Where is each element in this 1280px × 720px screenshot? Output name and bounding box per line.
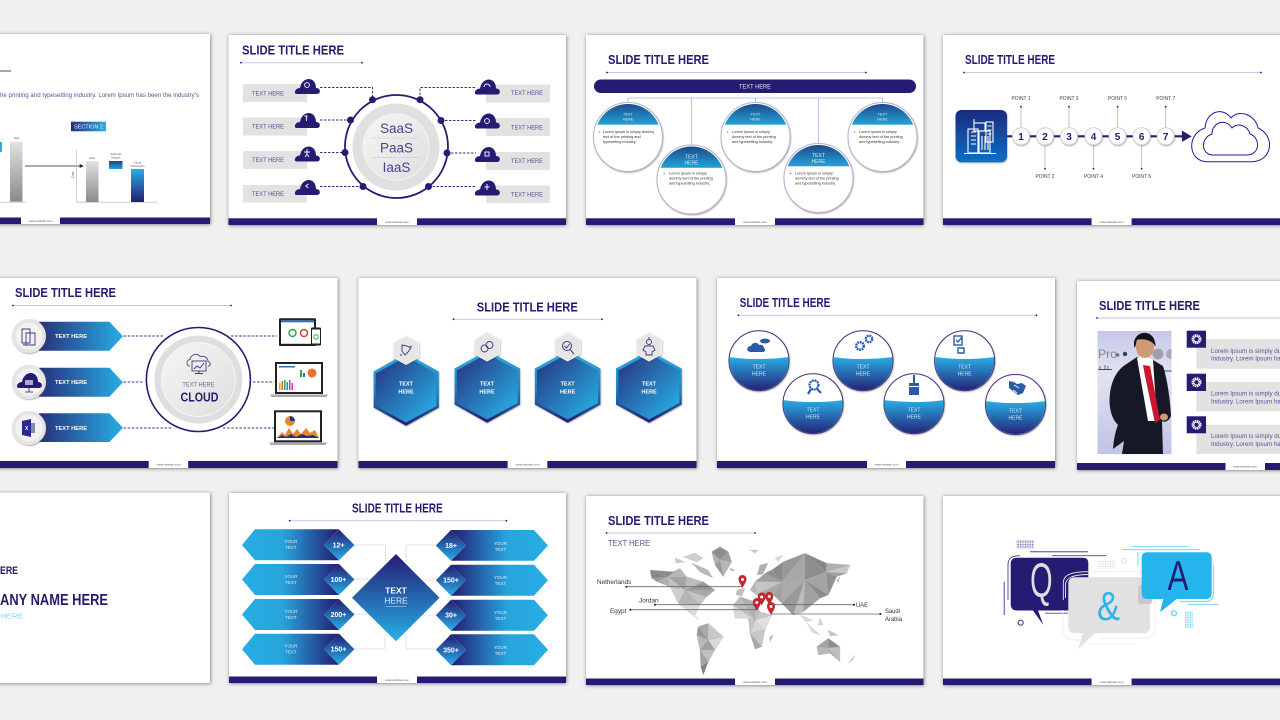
title: SLIDE TITLE HERE [740,295,831,310]
cloud inner disc [161,342,235,416]
circle 5: Lorem Ipsum is simply [859,130,897,134]
circle 2: dummy text of the printing [669,176,713,180]
title rule [453,318,603,320]
cloud icons [295,79,500,196]
service labels [380,121,413,175]
circle 2: • [664,172,666,176]
connector ends [1020,106,1167,170]
title rule [606,532,756,534]
point labels: POINT 1 [1012,96,1030,102]
right item 1: TEXT [495,547,506,552]
row 2 panel [1196,382,1280,411]
left item 1: 12+ [333,543,344,550]
circle 2: Lorem Ipsum is simply [669,172,707,176]
country labels: Egypt [610,608,627,615]
center diamond [352,554,440,641]
footer [1077,462,1280,470]
hexagon 2: HERE [479,389,495,395]
circle 6 [986,374,1046,436]
circle 3: TEXT [751,112,761,116]
left item 2: 100+ [331,577,346,584]
point labels: POINT 4 [1084,174,1103,180]
footer: www.website.com [1233,464,1257,468]
circle 2: HERE [685,160,699,166]
footer: www.website.com [516,462,540,466]
circle 5 [935,331,995,392]
circle 3: and typesetting industry. [732,140,773,144]
right item 3: TEXT [495,616,506,621]
right item 1 [436,530,548,561]
title: SLIDE TITLE HERE [965,52,1055,67]
cloud heading: CLOUD [180,390,218,404]
section 2 bar chart: Total [89,156,95,160]
footer [0,460,338,468]
service labels: PaaS [380,140,413,156]
right item 2: TEXT [495,581,506,586]
left item 4: TEXT [285,650,297,654]
left labels [243,84,307,202]
right label text: TEXT HERE [511,124,543,131]
grey backing [1138,585,1152,604]
subtitle fragment: ERE [0,565,18,577]
section 2 bar chart: Cost [71,172,75,178]
circle 4: • [790,172,792,176]
circle 3: Lorem Ipsum is simply [732,130,770,134]
dotted connectors [354,545,435,649]
footer: www.website.com [743,680,767,684]
circle 4: Lorem Ipsum is simply [795,172,833,176]
service labels: IaaS [383,160,410,175]
ring nodes [342,96,450,190]
circle 2 [657,145,726,214]
footer: www.website.com [385,220,409,224]
light dot pattern [1098,560,1115,568]
right item 2 [436,565,548,596]
point labels: POINT 5 [1108,96,1127,102]
circle 1: TEXT [753,364,765,370]
circle 4: HERE [907,414,922,420]
circle 1 [729,331,789,392]
footer [358,460,696,468]
slide: center diamond with numbers [229,493,566,683]
dot grid [1185,611,1193,628]
country labels: Saudi [885,608,900,615]
service separators [372,138,420,157]
leader lines [626,587,880,614]
right label text: TEXT HERE [511,90,543,97]
south america [697,623,723,675]
footer: www.website.com [157,462,181,466]
slide: cloud hub with devices [0,278,338,468]
circle 5: and typesetting industry. [859,140,900,144]
left item 3 [242,599,354,630]
footer: www.website.com [875,462,899,466]
slide: questions and answers [943,496,1280,685]
arrow row 3: X [25,426,29,432]
right labels [486,84,550,203]
slide: profile with bullet rows [1077,281,1280,470]
portrait photo: Pro [1098,347,1117,361]
circle 3: HERE [750,118,761,122]
timeline arrow [1007,132,1190,140]
footer: www.website.com [1100,220,1124,224]
section 2 bar chart: Support [111,155,121,159]
country labels: UAE [856,602,868,609]
title rule [289,520,507,522]
title: SLIDE TITLE HERE [352,501,443,516]
circle 5: HERE [877,118,888,122]
arrow row 3 [12,411,123,445]
title rule [606,72,867,73]
circle 3 [721,102,790,172]
node numbers: 6 [1139,132,1145,143]
circle 5: HERE [958,372,972,378]
dashed connectors [124,336,277,428]
hub disc [352,104,440,190]
hub inner disc [363,114,429,180]
circle 2: HERE [806,414,821,420]
hub ring [345,95,448,198]
eurasia [736,550,850,615]
node numbers: 7 [1163,132,1169,143]
leader ends [625,586,881,615]
bubble Q [1011,555,1088,625]
title rule [738,314,1037,316]
left label text [252,90,284,198]
circle 1: Lorem Ipsum is simply dummy [603,130,654,134]
circle 5: • [854,130,856,134]
footer [586,678,924,685]
tagline fragment: HERE [1,614,23,620]
left item 4: 150+ [331,647,346,654]
circle 5 [848,102,917,172]
section 2 bar chart: Staff and [111,152,121,156]
circle 3: TEXT [857,364,869,370]
portrait photo [1098,331,1176,454]
title: SLIDE TITLE HERE [608,52,709,67]
hexagon 3 [535,332,600,423]
arrow row 2: TEXT HERE [55,380,87,386]
header bar [594,80,916,93]
left item 3: 200+ [331,612,346,619]
left label text: TEXT HERE [252,90,284,98]
footer: www.website.com [29,219,53,223]
australia and new zealand [817,638,855,663]
circle 1: HERE [752,372,767,378]
right label text: TEXT HERE [511,192,543,198]
slide: hierarchy of circles [586,35,924,225]
bubble ampersand: & [1097,583,1120,629]
arrow row 1 [12,319,123,353]
left item 1: TEXT [285,545,297,550]
right item 3 [436,600,548,631]
hexagon 1: HERE [398,389,414,395]
device: tablet and phone [279,318,321,346]
white arcs around ampersand bubble [1063,572,1155,644]
device: laptop charts [270,362,328,397]
footer [229,676,566,683]
slide: section waterfall chart (cropped left) [0,34,210,224]
circle 5: dummy text of the printing [859,135,903,139]
circle 3: • [727,130,729,134]
node numbers: 2 [1042,132,1048,143]
slide: six water-level circles [717,278,1055,468]
row 2 text [1211,390,1280,405]
footer: www.website.com [743,220,767,224]
greenland and arctic islands [675,547,735,578]
service labels: SaaS [380,121,413,136]
country labels: Arabia [885,616,903,623]
point labels: POINT 7 [1156,96,1175,102]
circle 2: and typesetting industry. [669,182,710,186]
navy outlines behind Q [1004,552,1107,625]
right item 3: 30+ [445,613,457,620]
circle 2: TEXT [685,154,698,160]
node numbers: 1 [1018,132,1024,143]
right label text [511,90,543,198]
footer: www.website.com [1100,680,1124,684]
title rule [963,72,1262,73]
left item 4 [242,634,354,665]
hexagon 4: HERE [641,389,657,395]
numbered nodes [1012,128,1174,145]
footer [943,217,1280,225]
right item 4: TEXT [495,651,506,656]
section 2 label: SECTION 2 [74,124,103,130]
cloud disc [154,336,242,424]
circle 4: HERE [812,159,826,165]
circle 6: HERE [1009,415,1023,421]
section 2 bar chart: Cloud [134,160,141,164]
hexagon 2 [454,332,520,423]
circle 3: dummy text of the printing [732,135,776,139]
center diamond: TEXT [385,586,408,596]
circle 1 [594,102,662,172]
icon: cloud outline [1192,112,1269,162]
circle 2: TEXT [807,408,819,414]
intro text: he printing and typesetting industry. Lorem Ipsum has been the industry's [0,92,199,99]
circle 5: TEXT [878,112,888,116]
title rule [12,305,232,306]
circle 4 [784,143,853,212]
section 1 cropped bars [0,136,26,202]
company name: ANY NAME HERE [0,592,108,609]
circle 4 [884,374,944,435]
circle 4: TEXT [908,408,920,414]
footer [943,678,1280,685]
row 3 panel [1196,425,1280,454]
right item 4: 350+ [443,647,459,654]
title: SLIDE TITLE HERE [242,43,344,58]
arrow row 1: TEXT HERE [55,334,87,340]
arrow between sections [25,165,83,167]
blue outlines [1122,547,1218,616]
row 1 text [1211,348,1280,362]
row 3 text [1211,433,1280,448]
footer [717,460,1055,468]
dashed connectors [320,88,476,186]
row 2 icon [1187,374,1206,391]
low-poly world map [650,547,855,675]
node numbers: 5 [1115,132,1121,143]
circle 3: HERE [856,372,871,378]
subtitle: TEXT HERE [608,538,650,548]
southeast asia islands [800,615,838,636]
hexagon 1 [374,336,439,426]
footer [0,216,210,224]
hexagon 3: TEXT [561,382,575,388]
title rule [0,70,11,72]
cloud icon glyphs [304,83,490,190]
slide: closing company name (cropped left) [0,493,210,683]
circle 1: TEXT [623,112,634,116]
node numbers [1018,132,1169,143]
title rule [1096,317,1280,319]
title: SLIDE TITLE HERE [15,285,116,300]
connector lines [628,98,882,146]
left item 1: YOUR [284,539,298,544]
hexagon 2: TEXT [480,382,495,388]
cloud label: TEXT HERE [182,382,214,389]
left item 3: TEXT [285,615,297,620]
right item 2: YOUR [494,575,508,580]
point labels [1012,96,1175,180]
circle 6: TEXT [1009,408,1022,414]
section 2 label [71,122,106,131]
row 1 panel [1196,339,1280,369]
left item 2: TEXT [285,580,297,585]
arrow row 3: TEXT HERE [55,426,87,432]
left item 4: YOUR [284,644,298,648]
point labels: POINT 6 [1132,174,1151,180]
title rule [240,62,363,64]
left item 2: YOUR [284,574,298,579]
right label text: TEXT HERE [511,158,543,165]
slide: four hexagons [358,278,696,468]
africa [733,597,773,649]
circle 3 [833,331,893,392]
slide: seven point migration timeline [943,35,1280,225]
cloud ring [146,328,250,432]
icon: cloud monitor [187,354,210,374]
circle 4: dummy text of the printing [795,176,839,180]
pin centers [741,578,772,608]
circle 4: TEXT [812,153,825,159]
left label text: TEXT HERE [252,191,284,198]
right item 4 [436,634,548,665]
row 3 icon [1187,416,1206,433]
hexagon 4 [616,332,682,423]
left item 1 [242,529,354,560]
circle 5: TEXT [958,364,971,370]
arrow row 2 [12,365,123,399]
footer: www.website.com [385,678,409,682]
device: laptop dashboard [269,410,327,445]
dot pattern [1017,540,1034,548]
bubble A [1142,552,1212,612]
country labels: Netherlands [597,579,631,586]
circle 1: typesetting industry. [603,140,636,144]
slide: world map locations [586,496,924,685]
title: SLIDE TITLE HERE [1099,298,1200,313]
slide: SaaS PaaS IaaS hub [228,35,566,225]
hexagon 1: TEXT [399,382,414,388]
point connectors [1021,107,1166,169]
section 2 bar chart: Subscription [130,164,145,168]
bubble A: A [1168,552,1188,599]
header bar: TEXT HERE [739,83,771,90]
country labels: Jordan [639,598,659,605]
hexagon 4: TEXT [642,382,657,388]
point labels: POINT 3 [1060,96,1078,102]
title: SLIDE TITLE HERE [608,513,709,528]
location pins [738,575,775,615]
left item 2 [242,564,354,595]
title: SLIDE TITLE HERE [477,299,578,314]
left label text: TEXT HERE [252,124,284,131]
section 1 cropped bars: Total [13,136,19,140]
circle 1: • [598,130,600,134]
row 1 icon [1187,331,1206,348]
right item 4: YOUR [494,645,508,650]
center diamond: HERE [384,596,408,606]
bubble Q: Q [1030,555,1053,608]
right item 1: 18+ [445,543,457,550]
node numbers: 3 [1066,132,1072,143]
point labels: POINT 2 [1036,174,1054,180]
circle 4: and typesetting industry. [795,182,836,186]
footer [586,217,924,225]
section 2 bar chart [71,150,157,202]
left item 3: YOUR [284,609,298,614]
circle 1: HERE [623,118,634,122]
north america [650,568,715,620]
icon: office buildings tile [956,110,1007,162]
right item 2: 150+ [443,578,459,585]
bubble ampersand [1068,577,1150,649]
right item 1: YOUR [494,541,508,546]
right item 3: YOUR [494,610,508,615]
footer [228,217,566,225]
circle 1: text of the printing and [603,135,641,139]
node numbers: 4 [1091,132,1097,143]
country labels [597,579,903,623]
circle 2 [783,374,843,435]
hexagon 3: HERE [560,389,576,395]
left label text: TEXT HERE [252,157,284,164]
